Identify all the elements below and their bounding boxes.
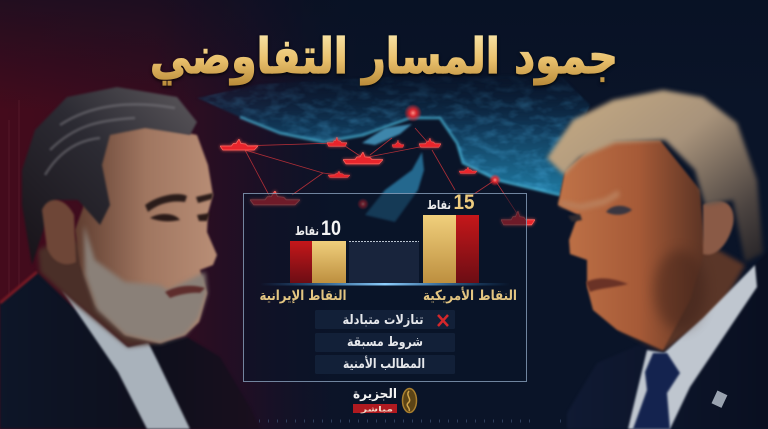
list rows: [315, 310, 455, 374]
map: connection lines: [239, 128, 520, 218]
portrait right: hair: [547, 90, 763, 262]
portrait right: neck: [620, 240, 745, 352]
bar chart: [260, 191, 517, 304]
portrait left: hair: [22, 87, 197, 265]
logo: live tag: مباشر: [359, 406, 393, 414]
portrait: Iranian negotiator: [0, 87, 260, 429]
portrait right: shirt: [628, 265, 757, 429]
portrait left: mouth: [165, 286, 205, 298]
value: 15 points: 15: [454, 191, 475, 214]
portrait right: lapel pin: [712, 391, 727, 408]
logo: Al Jazeera Mubasher: [353, 387, 416, 414]
bar: American points: [423, 215, 479, 283]
portrait right: mouth: [586, 278, 628, 292]
logo: wordmark: الجزيرة: [353, 387, 397, 402]
row: security demands: المطالب الأمنية: [343, 355, 425, 372]
portrait right: eyes and brows: [560, 190, 632, 222]
portrait: American president: [547, 90, 768, 429]
map of the Strait of Hormuz: [197, 75, 590, 225]
portrait right: shadowed cheek: [654, 250, 706, 330]
map: Iranian coast land mass: [197, 75, 590, 195]
portrait left: red rim glow: [0, 272, 37, 303]
portrait left: ear: [42, 200, 76, 264]
chart baseline: [260, 283, 510, 286]
map: Qeshm island: [362, 124, 412, 145]
logo: calligraphic emblem: [402, 388, 416, 412]
portrait right: jacket: [567, 250, 768, 429]
value: 10 points: 10: [321, 217, 341, 240]
map: hot spots: [357, 104, 501, 210]
portrait left: eyes and brows: [145, 193, 213, 221]
value: 10 points: [295, 217, 341, 240]
map: Musandam peninsula: [365, 152, 424, 222]
map: warships: [220, 137, 535, 225]
portrait left: hair streaks: [45, 104, 175, 175]
bar: Iranian points: [290, 241, 346, 283]
portrait right: face: [558, 140, 705, 350]
chart panel: [244, 191, 526, 382]
portrait left: face: [75, 125, 217, 343]
value: 15 points: نقاط: [427, 198, 451, 212]
panel frame: [244, 194, 526, 382]
value: 15 points: [427, 191, 475, 214]
icon: red cross: [438, 315, 448, 326]
row: mutual concessions: تنازلات متبادلة: [342, 313, 424, 328]
label: Iranian points: النقاط الإيرانية: [260, 288, 346, 304]
portrait left: beard: [84, 225, 207, 343]
portrait left: jacket: [0, 272, 260, 429]
title: جمود المسار التفاوضي: [150, 28, 618, 86]
portrait left: neck: [38, 235, 165, 347]
row: preconditions: شروط مسبقة: [347, 335, 423, 350]
portrait right: ear: [703, 200, 734, 255]
value: 10 points: نقاط: [295, 224, 319, 238]
label: American points: النقاط الأمريكية: [423, 287, 517, 304]
gap between bars: [349, 242, 419, 283]
portrait right: tie: [633, 353, 680, 429]
portrait left: shirt: [62, 290, 190, 429]
